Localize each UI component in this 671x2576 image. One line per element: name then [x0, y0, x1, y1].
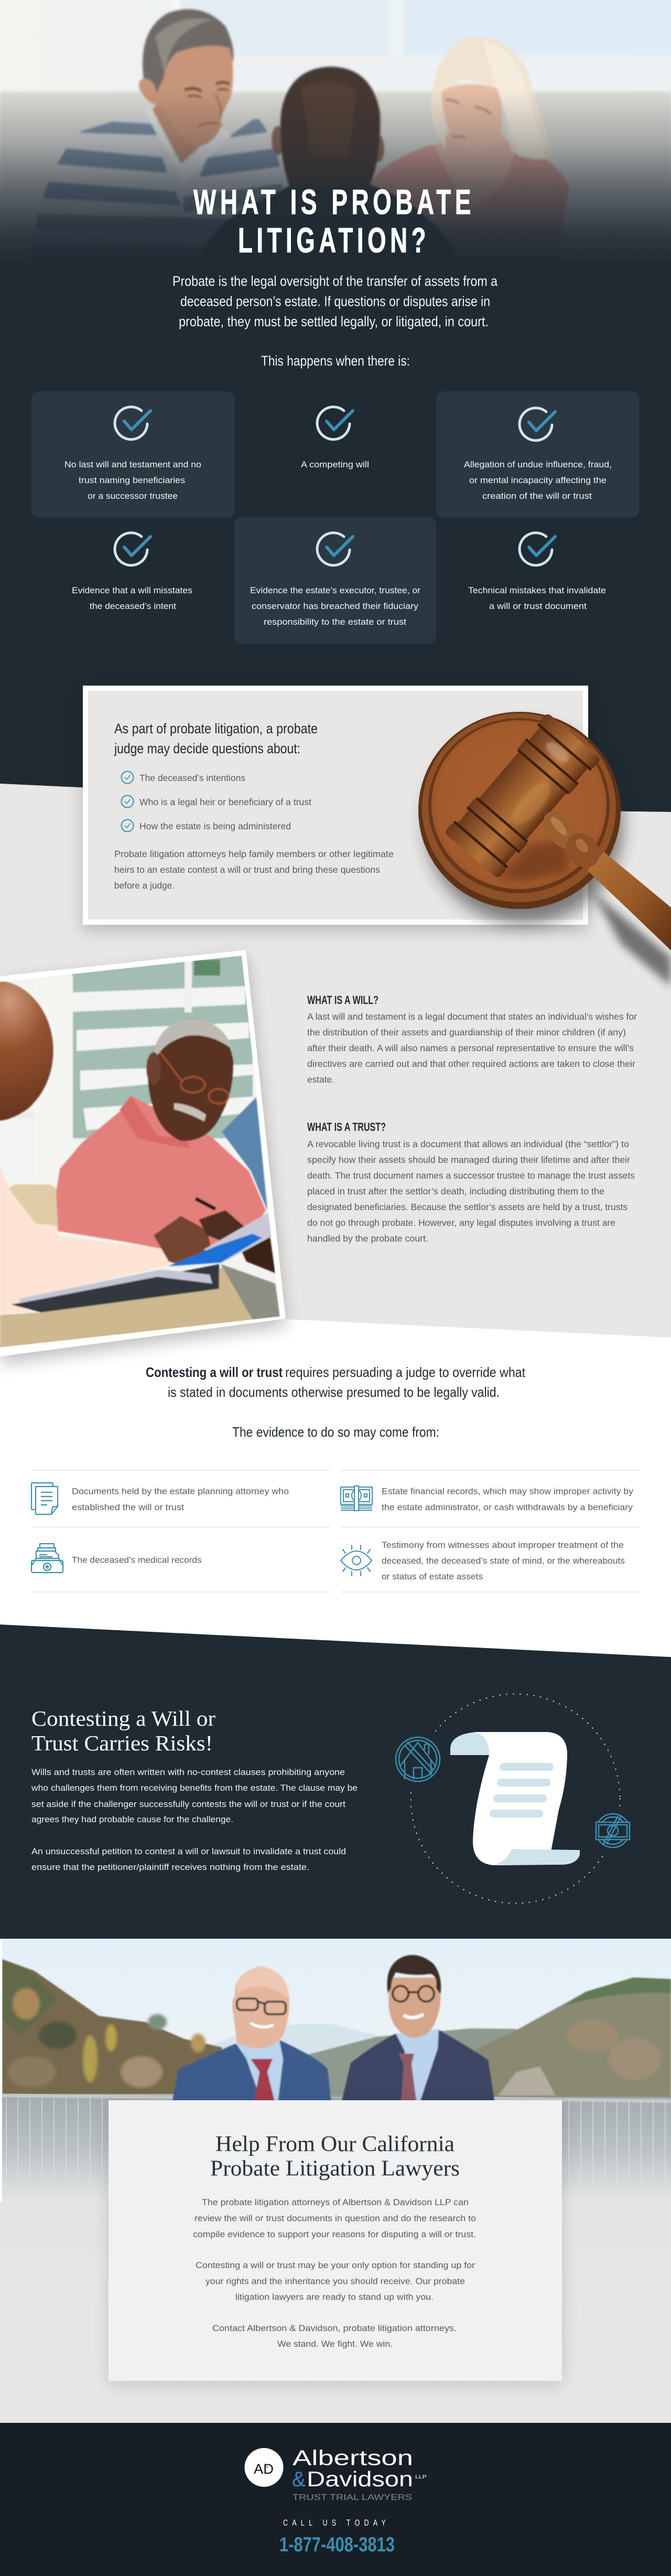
lawyer right [341, 1955, 495, 2103]
card 5: breach of duty: Evidence the estate’s executor, trustee, or [250, 585, 420, 595]
text: contact: Contact Albertson & Davidson, probate litigation attorneys. [212, 2323, 457, 2333]
intro text: probate, they must be settled legally, or litigated, in court. [179, 314, 489, 329]
text: no-contest clauses [31, 1767, 358, 1824]
text: financial records [382, 1487, 634, 1512]
text: testimony: or status of estate assets [382, 1572, 483, 1581]
intro text [172, 273, 498, 329]
text: attorneys review: compile evidence to support your reasons for disputing a will or trust. [193, 2229, 476, 2239]
heading: contesting carries risks: Contesting a Will or [31, 1706, 215, 1730]
checklist [122, 771, 311, 832]
text: financial records: the estate administrator, or cash withdrawals by a beneficiary [382, 1502, 633, 1512]
card 3: undue influence: or mental incapacity affecting the [469, 475, 607, 485]
title: WHAT IS PROBATE [193, 183, 475, 222]
card 5: breach of duty: responsibility to the estate or trust [264, 617, 406, 627]
text: unsuccessful petition: ensure that the petitioner/plaintiff receives nothing from the estate. [31, 1862, 309, 1872]
icon: money stack [341, 1486, 372, 1511]
paragraph: attorneys help [114, 849, 394, 891]
woman hair [431, 37, 553, 159]
woman chest [436, 132, 514, 193]
card 1: no will [31, 391, 234, 518]
logo: & [292, 2467, 306, 2491]
woman face [440, 83, 503, 133]
text: unsuccessful petition [31, 1846, 346, 1872]
man neck [151, 104, 223, 164]
card 2: competing will [301, 407, 369, 469]
heading: help from lawyers: Help From Our California [215, 2132, 454, 2156]
man hair [143, 9, 233, 100]
text: contact [212, 2323, 457, 2349]
heading: judge questions: As part of probate litigation, a probate [114, 721, 318, 736]
illustration: will scroll with risks [388, 1694, 637, 1903]
section: light background below image [0, 2201, 671, 2423]
logo: Albertson [293, 2445, 413, 2470]
text: what is a trust: specify how their assets should be managed during their lifetime and after their [307, 1155, 630, 1165]
section: light background [0, 784, 671, 1338]
text: unsuccessful petition: An unsuccessful petition to contest a will or lawsuit to invalidate a trust could [31, 1846, 346, 1856]
icon: documents [31, 1483, 58, 1514]
text: testimony: Testimony from witnesses about improper treatment of the [382, 1540, 624, 1550]
card 1: no will: trust naming beneficiaries [79, 475, 185, 485]
person behind [222, 1097, 267, 1210]
text: financial records: Estate financial records, which may show improper activity by [382, 1487, 634, 1496]
text: contact: We stand. We fight. We win. [277, 2339, 393, 2349]
text: documents: Documents held by the estate planning attorney who [72, 1487, 289, 1496]
boy hair [280, 67, 380, 186]
icon: eye witness [341, 1545, 372, 1576]
boy ears [272, 126, 284, 155]
card 3: undue influence: Allegation of undue influence, fraud, [464, 459, 612, 469]
checklist: Who is a legal heir or beneficiary of a trust [139, 797, 311, 807]
trousers [0, 1268, 253, 1348]
statement: contesting a will: Contesting a will or trust [146, 1364, 283, 1380]
footer [0, 2423, 671, 2576]
card 2: competing will: A competing will [301, 459, 369, 469]
text: attorneys review [193, 2197, 476, 2239]
paragraph: attorneys help: before a judge. [114, 880, 175, 891]
icon: no house [396, 1737, 440, 1781]
heading: help from lawyers: Probate Litigation Lawyers [210, 2157, 460, 2181]
lawyer left [172, 1966, 331, 2103]
text: what is a will: WHAT IS A WILL? [307, 993, 378, 1007]
statement: contesting a will: requires persuading a judge to override what [285, 1364, 526, 1380]
statement: contesting a will: is stated in documents otherwise presumed to be legally valid. [168, 1384, 500, 1400]
text: what is a trust: placed in trust after the settlor’s death, including distributing them to the [307, 1186, 604, 1196]
image: wooden gavel [418, 712, 671, 986]
gavel handle [587, 852, 671, 950]
paragraph: attorneys help: heirs to an estate contest a will or trust and bring these questions [114, 864, 380, 875]
cushion [9, 1183, 59, 1232]
text: attorneys review: The probate litigation attorneys of Albertson & Davidson LLP can [202, 2197, 469, 2207]
subheading: evidence: The evidence to do so may come from: [232, 1424, 439, 1440]
text: no-contest clauses: Wills and trusts are often written with no-contest clauses prohibiting anyone [31, 1767, 345, 1777]
section: dark risks background [0, 1624, 671, 1939]
documents [204, 1213, 272, 1264]
text: what is a trust: designated beneficiaries. Because the settlor’s assets are held by a trust, trusts [307, 1202, 627, 1212]
text: testimony: deceased, the deceased’s state of mind, or the whereabouts [382, 1556, 625, 1566]
text: attorneys review: review the will or trust documents in question and do the research to [194, 2214, 476, 2224]
woman shirt [368, 145, 569, 262]
icon: no money [596, 1814, 630, 1847]
man face [139, 46, 233, 147]
text: documents: established the will or trust [72, 1502, 184, 1512]
text: what is a trust: death. The trust document names a successor trustee to manage the trust assets [307, 1170, 635, 1181]
intro text: deceased person’s estate. If questions or disputes arise in [180, 294, 490, 309]
icon: medical file box [31, 1544, 63, 1573]
gavel handle knobs [536, 805, 607, 874]
card 4: will misstates intent: the deceased’s intent [90, 601, 176, 611]
text: no-contest clauses: set aside if the challenger successfully contests the will or trust or if the court [31, 1799, 345, 1809]
text: what is a will: A last will and testament is a legal document that states an individual’s wishes for [307, 1011, 637, 1022]
text: no-contest clauses: who challenges them from receiving benefits from the estate. The clause may be [31, 1783, 358, 1793]
phone number: 1-877-408-3813 [279, 2534, 395, 2556]
heading: judge questions: judge may decide questions about: [114, 741, 300, 756]
logo: TRUST TRIAL LAWYERS [293, 2493, 412, 2502]
gavel shadow on block [498, 839, 569, 881]
card 5: breach of duty: conservator has breached their fiduciary [252, 601, 419, 611]
black folder [11, 1264, 219, 1312]
image: lawyers with California hills [0, 1939, 671, 2206]
panel: evidence sources [31, 1470, 640, 1592]
panel: conditions grid [31, 391, 639, 644]
panel: California lawyers [109, 2100, 562, 2385]
card 6: technical mistakes: a will or trust document [489, 601, 587, 611]
text: only option: litigation lawyers are ready to stand up with you. [235, 2292, 434, 2302]
card 4: will misstates intent: Evidence that a will misstates [72, 585, 192, 595]
card 4: will misstates intent [72, 533, 192, 611]
text: only option: Contesting a will or trust may be your only option for standing up for [196, 2260, 475, 2270]
text: what is a trust: do not go through probate. However, any legal disputes involving a trust are [307, 1217, 615, 1228]
card 3: undue influence: creation of the will or trust [482, 491, 592, 501]
heading: contesting carries risks: Trust Carries Risks! [31, 1731, 213, 1755]
card 1: no will: No last will and testament and no [64, 459, 201, 469]
card 1: no will: or a successor trustee [88, 491, 178, 501]
panel: judge decisions [83, 686, 588, 931]
subheading: this happens when: This happens when there is: [261, 353, 410, 369]
card 5: breach of duty [234, 517, 436, 644]
hands [154, 1216, 212, 1265]
text: what is a will [307, 993, 637, 1085]
logo: Davidson [307, 2467, 413, 2491]
logo [244, 2445, 427, 2502]
text: medical records: The deceased’s medical records [72, 1555, 201, 1565]
man shirt [270, 138, 274, 148]
boy body [209, 184, 450, 247]
heading: contesting carries risks [31, 1706, 215, 1755]
image: advisor with client [0, 944, 294, 1364]
scroll [450, 1732, 580, 1865]
intro text: Probate is the legal oversight of the transfer of assets from a [172, 273, 498, 289]
text: what is a trust: handled by the probate court. [307, 1233, 428, 1244]
heading: judge questions [114, 721, 318, 756]
text: only option: your rights and the inheritance you should receive. Our probate [205, 2276, 465, 2286]
older man head [147, 1034, 234, 1142]
text: what is a will: estate. [307, 1074, 334, 1085]
statement: contesting a will [146, 1364, 526, 1400]
paragraph: attorneys help: Probate litigation attorneys help family members or other legitimate [114, 849, 394, 859]
card 3: undue influence [436, 391, 639, 518]
collar [145, 108, 232, 160]
railing [2, 2096, 671, 2198]
text: testimony [382, 1540, 625, 1581]
left advisor head [0, 980, 53, 1121]
text: what is a trust: A revocable living trust is a document that allows an individual (the “settlor”) to [307, 1139, 629, 1149]
section: dark introduction background [0, 0, 671, 812]
peach shirt [0, 1166, 170, 1314]
gavel head [444, 712, 601, 879]
text: what is a trust [307, 1120, 635, 1244]
red shirt [56, 1096, 266, 1251]
checklist: How the estate is being administered [139, 821, 291, 831]
text: what is a will: directives are carried out and that other required actions are taken to close their [307, 1059, 635, 1069]
logo: & [265, 2464, 269, 2470]
text: documents [72, 1487, 289, 1512]
logo: LLP [415, 2474, 427, 2479]
text: only option [196, 2260, 475, 2302]
hero photo: family meeting [0, 0, 671, 273]
text: what is a will: after their death. A will also names a personal representative to ensure the will’s [307, 1043, 634, 1053]
title [193, 183, 475, 260]
title: LITIGATION? [238, 221, 430, 260]
card 6: technical mistakes: Technical mistakes that invalidate [468, 585, 606, 595]
heading: help from lawyers [210, 2132, 460, 2181]
text: no-contest clauses: agrees they had probable cause for the challenge. [31, 1814, 233, 1824]
text: what is a trust: WHAT IS A TRUST? [307, 1120, 386, 1134]
logo: AD [254, 2461, 274, 2477]
checklist: The deceased’s intentions [139, 773, 245, 783]
text: what is a will: the distribution of their assets and guardianship of their minor children (if any) [307, 1027, 626, 1038]
card 6: technical mistakes [468, 533, 606, 611]
call label: CALL US TODAY [283, 2518, 390, 2528]
